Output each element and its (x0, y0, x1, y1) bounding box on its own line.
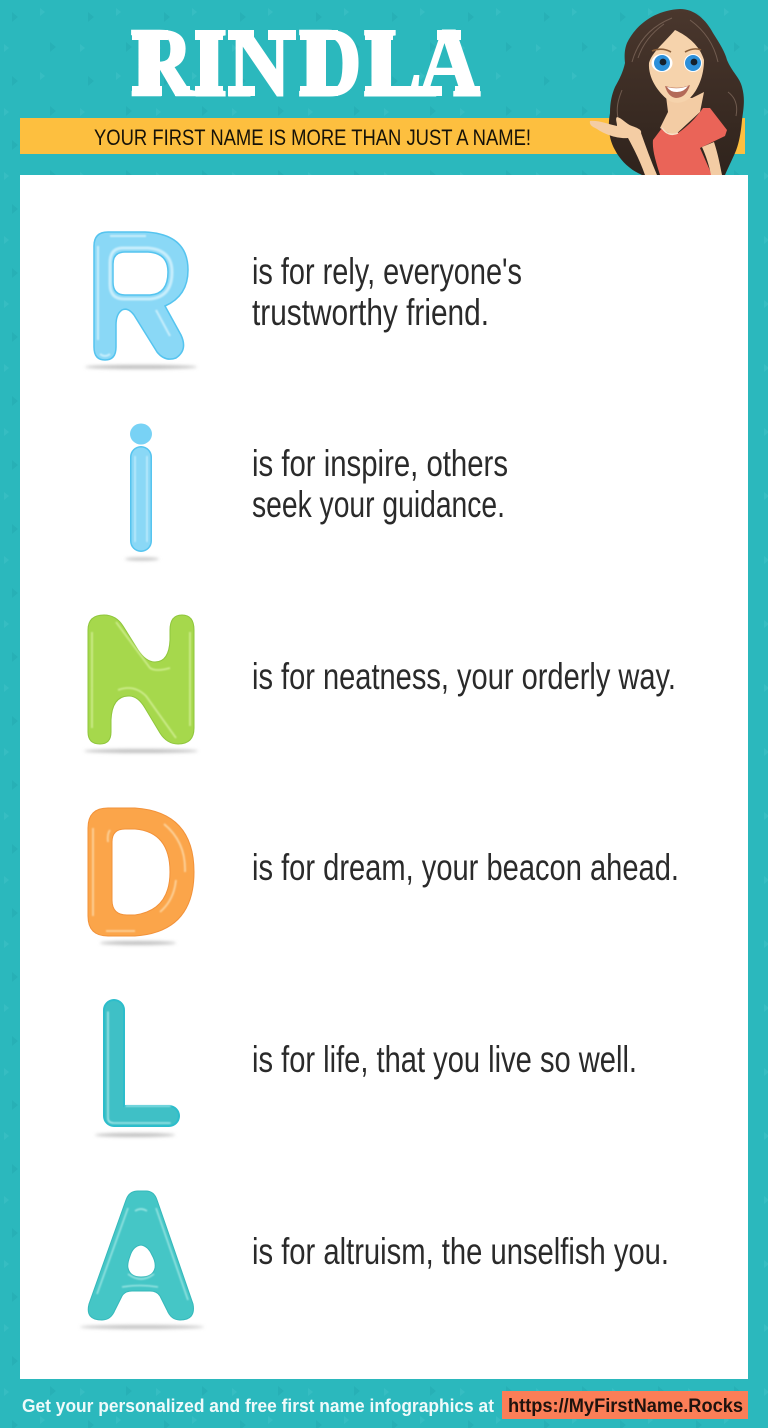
glossy letter R (94, 232, 188, 360)
banner: YOUR FIRST NAME IS MORE THAN JUST A NAME! (94, 125, 531, 150)
letter L row (95, 1010, 637, 1137)
letter I row (125, 424, 508, 561)
main white panel (20, 175, 748, 1379)
shadow (80, 1325, 204, 1329)
glossy letter L (108, 1010, 170, 1123)
title: RINDLA (130, 9, 480, 118)
glossy letter i (130, 424, 152, 552)
character illustration (590, 9, 744, 175)
text: R meaning: trustworthy friend. (252, 292, 489, 333)
text: I meaning (252, 443, 508, 525)
glossy letter N (88, 615, 194, 744)
letter D row (88, 808, 679, 945)
text: R meaning (252, 251, 522, 333)
text: A meaning: is for altruism, the unselfish you. (252, 1231, 669, 1272)
shadow (100, 941, 176, 945)
shadow (84, 749, 198, 753)
footer link badge: https://MyFirstName.Rocks (508, 1396, 743, 1417)
text: R meaning: is for rely, everyone's (252, 251, 522, 292)
shadow (95, 1133, 175, 1137)
letter R row (85, 232, 522, 369)
text: L meaning: is for life, that you live so well. (252, 1039, 637, 1080)
banner (20, 118, 745, 154)
footer text: Get your personalized and free first name infographics at (22, 1396, 494, 1416)
letter A row (80, 1191, 669, 1329)
shadow (125, 557, 159, 561)
glossy letter D (88, 808, 194, 936)
glossy letter A (88, 1191, 193, 1320)
letter N row (84, 615, 676, 753)
shadow (85, 365, 197, 369)
text: I meaning: seek your guidance. (252, 484, 505, 525)
text: I meaning: is for inspire, others (252, 443, 508, 484)
